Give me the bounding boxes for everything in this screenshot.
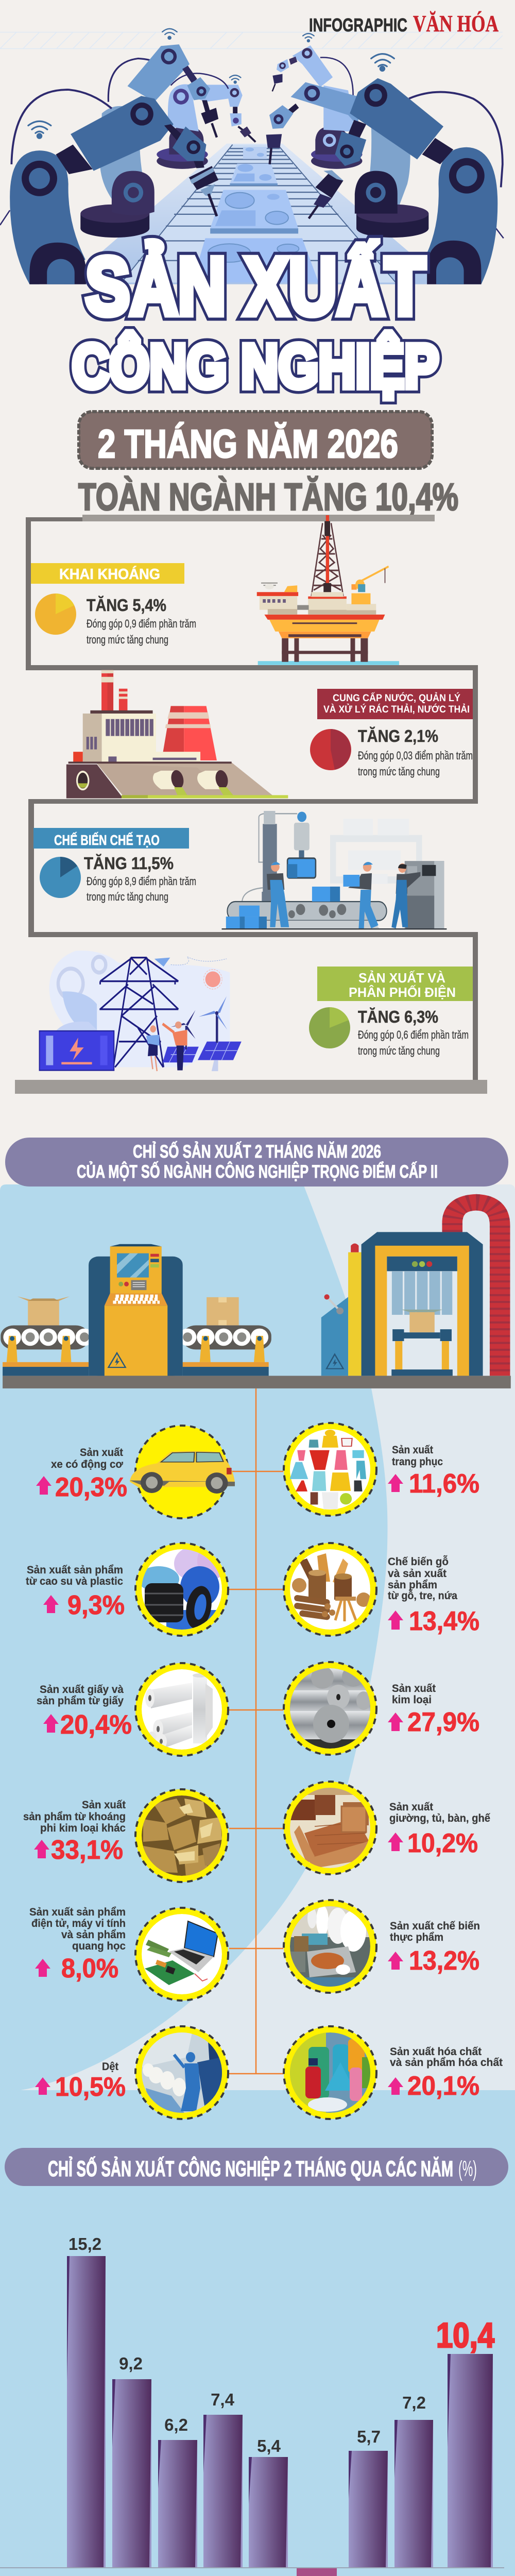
arrow xyxy=(43,1714,59,1733)
text: Chế biến gỗ xyxy=(388,1555,449,1568)
item: rubber and plastic xyxy=(26,1543,228,1636)
bar 2020 xyxy=(158,2415,197,2568)
top-left robot xyxy=(108,44,228,138)
bar 2021: 7,4 xyxy=(211,2390,235,2409)
text xyxy=(388,1555,457,1602)
heading xyxy=(317,967,473,1001)
illustration: factory workers xyxy=(222,811,447,929)
bar 2021 xyxy=(203,2390,243,2568)
text: Sản xuất giấy và xyxy=(40,1684,124,1696)
bar 2022 xyxy=(249,2436,288,2568)
panel: manufacturing xyxy=(33,828,196,903)
value: 13,4% xyxy=(409,1606,479,1636)
text: sản phẩm từ giấy xyxy=(37,1695,124,1707)
section heading 2: (%) xyxy=(458,2157,477,2181)
value: 11,6% xyxy=(409,1469,479,1499)
illustration: machines on the floor xyxy=(1,1202,511,1388)
text block xyxy=(358,1007,469,1057)
item: non-metallic minerals xyxy=(23,1789,228,1882)
illustration: factory xyxy=(66,670,288,798)
item: metal xyxy=(284,1662,479,1755)
text: Sản xuất xyxy=(80,1447,123,1459)
item: textiles xyxy=(35,2026,228,2119)
heading: KHAI KHOÁNG xyxy=(59,565,160,583)
value: 9,3% xyxy=(67,1590,125,1620)
arrow xyxy=(388,1952,403,1970)
text: Sản xuất sản phẩm xyxy=(27,1564,123,1576)
heading xyxy=(31,563,184,584)
arrow xyxy=(388,2077,403,2095)
arrow xyxy=(388,1833,403,1851)
text block: trong mức tăng chung xyxy=(87,633,168,646)
text: Sản xuất xyxy=(392,1444,433,1456)
text xyxy=(392,1444,443,1468)
text block: TĂNG 5,4% xyxy=(87,596,166,615)
text block xyxy=(358,726,473,778)
heading xyxy=(33,828,189,849)
text xyxy=(390,1920,480,1943)
bar 2025 xyxy=(394,2393,433,2568)
central machine xyxy=(89,1244,183,1376)
press machine xyxy=(321,1202,500,1376)
value: 27,9% xyxy=(407,1707,479,1737)
section heading 2 xyxy=(5,2148,508,2186)
bar 2024: 5,7 xyxy=(357,2427,381,2446)
heading: SẢN XUẤT VÀ xyxy=(358,970,445,986)
value: 20,4% xyxy=(60,1710,132,1740)
bar 2026 xyxy=(436,2316,494,2568)
text: và sản phẩm xyxy=(61,1929,126,1941)
bar 2018: 15,2 xyxy=(68,2234,101,2253)
illustration: oil rig xyxy=(257,515,399,665)
workers xyxy=(146,1025,159,1071)
pie chart xyxy=(310,729,351,770)
arrow xyxy=(388,1713,403,1731)
text: phi kim loại khác xyxy=(40,1822,126,1834)
header logo xyxy=(309,10,499,37)
value: 13,2% xyxy=(409,1946,479,1976)
arrow xyxy=(35,1959,50,1977)
value: 33,1% xyxy=(51,1835,123,1865)
icon: tyres photo xyxy=(135,1543,228,1636)
text: và sản phẩm hóa chất xyxy=(390,2057,503,2069)
text block: Đóng góp 8,9 điểm phần trăm xyxy=(87,875,196,888)
pie chart xyxy=(40,857,81,898)
text: và sản xuất xyxy=(388,1568,447,1580)
item: wood xyxy=(284,1543,479,1636)
arrow xyxy=(388,1474,403,1492)
worker 3 xyxy=(391,863,420,928)
date badge xyxy=(79,412,432,468)
text: kim loại xyxy=(392,1694,432,1706)
panel: blue background xyxy=(0,1184,515,2576)
text xyxy=(392,1683,436,1706)
icon: metal rolls photo xyxy=(284,1662,376,1755)
illustration: robot arms over conveyor xyxy=(0,29,504,284)
text block: TĂNG 2,1% xyxy=(358,726,438,745)
date badge: 2 THÁNG NĂM 2026 xyxy=(98,421,398,466)
section heading 1: CHỈ SỐ SẢN XUẤT 2 THÁNG NĂM 2026 xyxy=(133,1141,381,1162)
heading: CUNG CẤP NƯỚC, QUẢN LÝ xyxy=(333,691,460,704)
item: furniture xyxy=(284,1782,490,1874)
title: SẢN XUẤT xyxy=(85,241,425,332)
icon: textile photo xyxy=(135,2026,228,2119)
connector lines xyxy=(229,1388,283,2074)
arrow xyxy=(36,1476,52,1495)
text xyxy=(29,1906,126,1952)
pie chart xyxy=(35,594,76,635)
frame lines xyxy=(26,517,478,1080)
bar 2020: 6,2 xyxy=(164,2415,188,2434)
value: 20,1% xyxy=(407,2071,479,2101)
icon: clothes xyxy=(284,1423,376,1516)
conveyor belt xyxy=(64,144,447,284)
arrow xyxy=(35,2077,50,2095)
text: điện tử, máy vi tính xyxy=(31,1918,126,1929)
text: Sản xuất xyxy=(82,1799,126,1811)
heading: CHẾ BIẾN CHẾ TẠO xyxy=(54,832,160,848)
text block: trong mức tăng chung xyxy=(358,1044,440,1057)
value: 10,2% xyxy=(407,1828,478,1858)
heading: VÀ XỬ LÝ RÁC THẢI, NƯỚC THẢI xyxy=(323,703,470,715)
truss xyxy=(0,32,503,48)
text block: trong mức tăng chung xyxy=(87,890,168,903)
left conveyor xyxy=(1,1296,271,1376)
text xyxy=(389,1801,490,1824)
text block: trong mức tăng chung xyxy=(358,765,440,778)
text block: Đóng góp 0,9 điểm phần trăm xyxy=(87,617,196,630)
text: sản phẩm từ khoáng xyxy=(23,1811,126,1823)
text: quang học xyxy=(72,1940,126,1952)
bar 2023 xyxy=(297,2568,337,2576)
icon: bed photo xyxy=(284,1782,376,1874)
control panel xyxy=(405,861,444,928)
heading xyxy=(317,689,473,719)
text block xyxy=(84,854,196,903)
right big robot xyxy=(309,78,504,284)
middle-left light robot xyxy=(168,84,255,142)
bar chart xyxy=(0,2234,504,2576)
bar 2025: 7,2 xyxy=(402,2393,426,2412)
text block: Đóng góp 0,6 điểm phần trăm xyxy=(358,1028,469,1041)
back-left robot xyxy=(80,106,154,238)
text xyxy=(23,1799,126,1834)
title: CÔNG NGHIỆP xyxy=(72,331,439,401)
arrow xyxy=(388,1611,403,1630)
panel: water and waste xyxy=(310,689,473,778)
bottom bar xyxy=(15,1080,487,1094)
item: motor vehicles xyxy=(36,1426,235,1518)
text: Sản xuất xyxy=(389,1801,433,1813)
illustration: power tower and renewables xyxy=(40,951,242,1071)
title: CÔNG NGHIỆP xyxy=(72,331,439,401)
icon: wood photo xyxy=(284,1543,376,1636)
top bar xyxy=(82,515,435,521)
icon: food factory photo xyxy=(284,1900,376,1993)
item: food xyxy=(284,1900,480,1993)
back-right robot xyxy=(323,118,428,238)
pie chart xyxy=(309,1007,350,1048)
text block: Đóng góp 0,03 điểm phần trăm xyxy=(358,749,473,762)
text block: TĂNG 11,5% xyxy=(84,854,174,873)
top-right robot xyxy=(266,45,359,164)
arrow xyxy=(43,1595,59,1613)
text: giường, tủ, bàn, ghế xyxy=(389,1812,490,1824)
icon: gold nuggets photo xyxy=(135,1789,228,1882)
text: Sản xuất chế biến xyxy=(390,1920,480,1932)
text xyxy=(51,1447,123,1470)
icon: chemical bottles photo xyxy=(284,2026,376,2119)
floor xyxy=(3,1376,511,1388)
title: SẢN XUẤT xyxy=(85,241,425,332)
bar 2018 xyxy=(67,2234,106,2568)
icon: car xyxy=(130,1426,235,1518)
text xyxy=(390,2046,503,2069)
value: 8,0% xyxy=(61,1954,118,1984)
value: 20,3% xyxy=(55,1472,127,1502)
text: trang phục xyxy=(392,1456,443,1468)
text: thực phẩm xyxy=(390,1931,443,1943)
item: electronics xyxy=(29,1906,228,2001)
text: Dệt xyxy=(102,2061,118,2073)
panel: electricity xyxy=(309,967,473,1057)
value: 10,5% xyxy=(55,2072,126,2102)
text xyxy=(37,1684,124,1707)
text: Sản xuất xyxy=(392,1683,436,1694)
text block: TĂNG 6,3% xyxy=(358,1007,438,1026)
item: clothing xyxy=(284,1423,479,1516)
item: paper xyxy=(37,1663,228,1756)
text: Sản xuất hóa chất xyxy=(390,2046,482,2058)
text block xyxy=(87,596,196,646)
heading: PHÂN PHỐI ĐIỆN xyxy=(349,985,456,1000)
bar 2024 xyxy=(349,2427,388,2568)
bar 2019: 9,2 xyxy=(119,2354,143,2373)
text xyxy=(26,1564,123,1587)
wifi icons xyxy=(28,29,394,139)
title xyxy=(72,241,439,401)
text: từ cao su và plastic xyxy=(26,1575,123,1587)
worker 1 xyxy=(267,862,289,927)
bar 2022: 5,4 xyxy=(257,2436,281,2455)
text: Sản xuất sản phẩm xyxy=(29,1906,126,1918)
text: từ gỗ, tre, nứa xyxy=(388,1589,457,1602)
section heading 1 xyxy=(5,1138,508,1187)
bar 2026: 10,4 xyxy=(436,2316,494,2355)
text: sản phẩm xyxy=(388,1579,437,1591)
worker 2 xyxy=(344,862,379,928)
item: chemicals xyxy=(284,2026,503,2119)
icon: paper rolls photo xyxy=(135,1663,228,1756)
purple bases xyxy=(157,126,362,169)
text: xe có động cơ xyxy=(51,1459,123,1470)
arrow xyxy=(34,1840,49,1858)
bar 2019 xyxy=(112,2354,151,2568)
left big robot xyxy=(0,90,218,284)
panel: mining xyxy=(31,563,196,646)
icon: laptop photo xyxy=(135,1908,228,2001)
header logo: INFOGRAPHIC xyxy=(309,14,407,36)
